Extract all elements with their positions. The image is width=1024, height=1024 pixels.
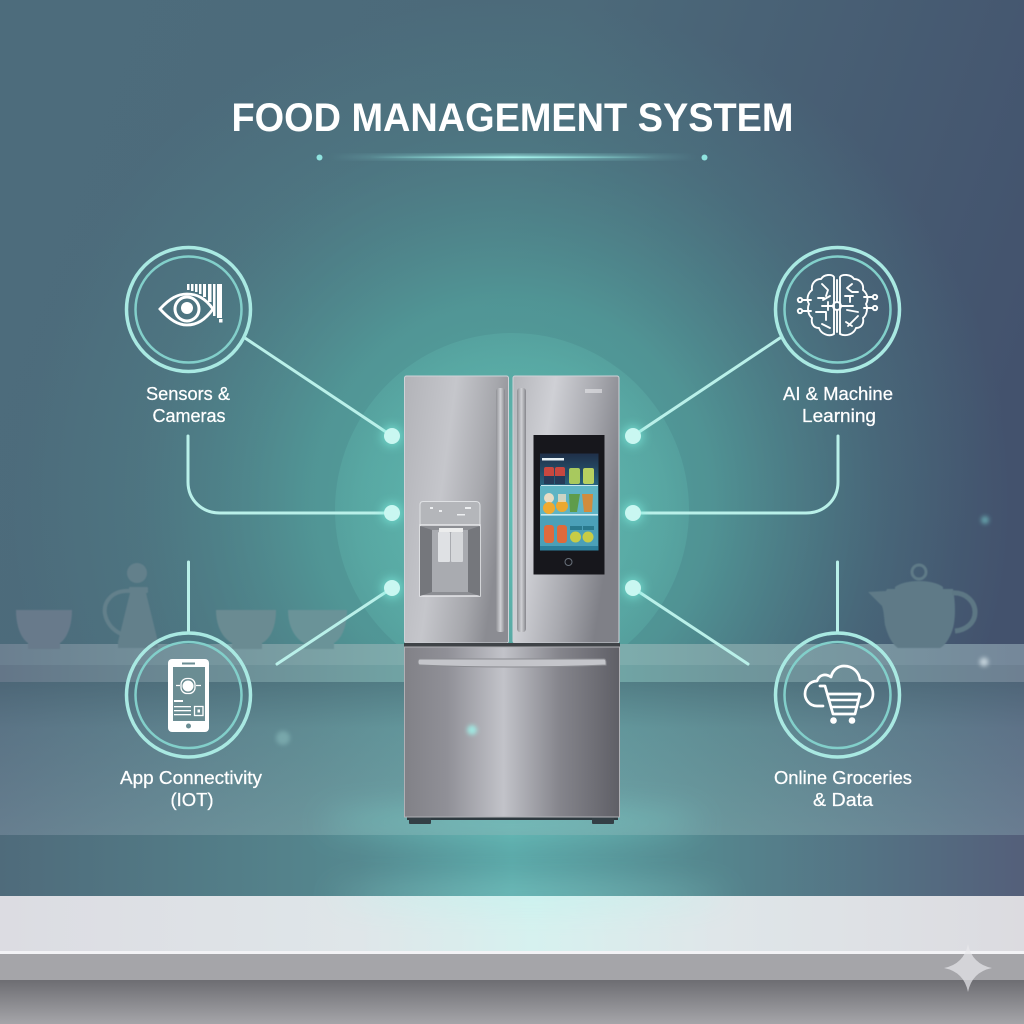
icon: cloud and shopping cart [805, 666, 873, 724]
glow halo behind refrigerator [335, 333, 689, 687]
icon ring: sensors [126, 248, 250, 372]
label: online groceries [774, 767, 912, 810]
left door [404, 376, 508, 643]
drawer handle [418, 659, 606, 667]
title: FOOD MANAGEMENT SYSTEM [232, 96, 794, 140]
lower drawer [404, 647, 620, 817]
display food: bottom shelf [540, 516, 598, 546]
display food: middle shelf [540, 486, 598, 516]
icon ring: AI [776, 248, 900, 372]
countertop [0, 888, 1024, 1024]
floating light particles [276, 516, 989, 745]
label: online groceries: & Data [813, 789, 874, 810]
label: app connectivity [120, 767, 263, 810]
jug [105, 563, 158, 648]
icon: circuit brain [798, 275, 877, 335]
connector lines [188, 338, 838, 664]
display food: top shelf [541, 467, 598, 486]
icon: smartphone [168, 659, 209, 732]
label: AI and machine learning [783, 383, 893, 426]
label: app connectivity: (IOT) [170, 789, 214, 810]
label: online groceries: Online Groceries [774, 767, 912, 788]
smart display [534, 435, 604, 574]
label: sensors and cameras [146, 383, 231, 426]
title divider [316, 154, 708, 160]
smart refrigerator [404, 376, 620, 824]
label: sensors and cameras: Cameras [152, 405, 226, 426]
water dispenser [420, 502, 480, 596]
fridge feet and shadow [407, 816, 618, 824]
bowl one [16, 610, 72, 649]
icon ring: groceries [776, 633, 900, 757]
label: app connectivity: App Connectivity [120, 767, 263, 788]
label: sensors and cameras: Sensors & [146, 383, 231, 404]
bowl two [216, 610, 276, 649]
door handles [496, 388, 526, 632]
teapot [868, 565, 975, 648]
floor and lower band [0, 682, 1024, 896]
brand mark [585, 389, 602, 393]
feature: AI and machine learning [776, 248, 900, 426]
bowl three [288, 610, 347, 649]
back shelf [0, 644, 1024, 682]
label: AI and machine learning: AI & Machine [783, 383, 893, 404]
label: AI and machine learning: Learning [802, 405, 876, 426]
feature: app connectivity [120, 633, 263, 810]
connector node dots [382, 426, 643, 598]
feature: online groceries [774, 633, 912, 810]
background kitchen decor [16, 563, 975, 649]
door gap [404, 643, 620, 648]
icon ring: app [126, 633, 250, 757]
feature: sensors and cameras [126, 248, 250, 426]
sparkle mark [944, 944, 992, 992]
icon: eye and barcode [160, 284, 222, 325]
right door [513, 376, 619, 643]
